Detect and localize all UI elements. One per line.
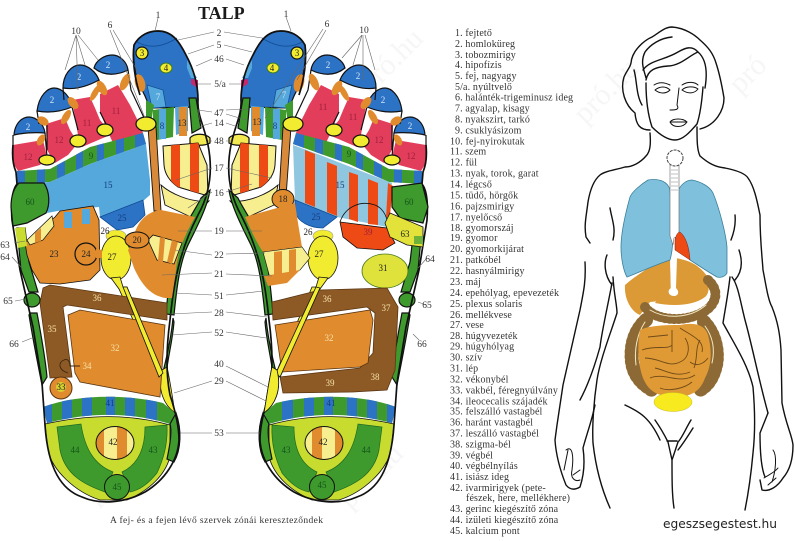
numbered list: 38. szigma-bél <box>450 439 511 450</box>
ureter <box>276 287 320 377</box>
middle labels: 2 <box>217 29 222 39</box>
foot zone numbers: 12 <box>406 151 416 161</box>
watermark: pró.hu <box>77 432 155 510</box>
foot zone numbers: 31 <box>378 263 388 273</box>
middle labels: 40 <box>214 360 224 370</box>
middle labels: 17 <box>214 164 224 174</box>
middle labels: 28 <box>214 309 224 319</box>
zone 25 <box>100 200 145 230</box>
facial features <box>654 82 698 126</box>
foot zone numbers: 8 <box>273 121 278 131</box>
foot zone numbers: 23 <box>50 249 59 259</box>
bust right <box>731 215 741 280</box>
foot zone numbers: 2 <box>408 121 412 131</box>
middle labels: 64 <box>425 255 435 265</box>
small intestine <box>638 324 711 397</box>
liver and stomach <box>625 253 709 315</box>
numbered list: 18. gyomorszáj <box>450 223 514 234</box>
numbered list: 16. pajzsmirigy <box>450 201 514 212</box>
middle labels: 66 <box>9 340 19 350</box>
zone 15 lung <box>19 144 150 217</box>
middle labels: 65 <box>422 301 432 311</box>
numbered list: 28. húgyvezeték <box>450 331 518 342</box>
foot zone numbers: 11 <box>319 102 327 112</box>
foot zone numbers: 15 <box>336 180 345 190</box>
numbered list: 29. húgyhólyag <box>450 342 514 353</box>
foot zone numbers: 2 <box>356 71 360 81</box>
foot zone numbers: 32 <box>324 333 334 343</box>
numbered list: 41. isiász ideg <box>450 472 509 483</box>
heart <box>675 232 690 260</box>
neck and left shoulder <box>555 133 650 489</box>
numbered list: 34. ileocecalis szájadék <box>450 397 548 408</box>
zone 63 <box>15 216 54 248</box>
numbered list: 2. homloküreg <box>455 39 515 50</box>
foot zone numbers: 42 <box>108 437 118 447</box>
foot zone numbers: 27 <box>108 252 117 262</box>
foot zone numbers: 7 <box>282 90 287 100</box>
middle labels: 10 <box>71 27 81 37</box>
middle labels: 19 <box>214 227 224 237</box>
hand left fingers <box>564 449 580 481</box>
numbered list: 35. felszálló vastagbél <box>450 406 543 417</box>
liver notches <box>64 209 90 228</box>
foot zone numbers <box>24 48 416 492</box>
foot zone numbers: 42 <box>318 437 328 447</box>
foot zone numbers: 2 <box>77 72 81 82</box>
foot zone numbers: 11 <box>349 112 357 122</box>
middle labels: 46 <box>214 55 224 65</box>
middle labels: 29 <box>214 377 224 387</box>
middle labels: 53 <box>214 429 224 439</box>
numbered list: 36. haránt vastagbél <box>450 417 533 428</box>
foot zone numbers: 60 <box>26 197 35 207</box>
zone 33 <box>50 377 72 399</box>
title: TALP <box>198 3 245 23</box>
numbered list: 45. kalcium pont <box>450 526 520 537</box>
numbered list: 9. csuklyásizom <box>455 126 522 137</box>
foot zone numbers: 7 <box>156 92 161 102</box>
foot zone numbers: 12 <box>54 135 64 145</box>
hand right fingers <box>764 450 778 485</box>
numbered list: 26. mellékvese <box>450 310 512 321</box>
torso right <box>723 277 768 510</box>
hair <box>623 27 724 130</box>
groin <box>625 405 693 508</box>
hair fringe <box>634 37 706 105</box>
zone 30 heart <box>340 222 395 250</box>
middle labels: 21 <box>214 270 224 280</box>
numbered list: 13. nyak, torok, garat <box>450 168 539 179</box>
zone 22 <box>263 247 310 286</box>
foot zone numbers: 12 <box>374 135 384 145</box>
numbered list: 40. végbélnyílás <box>450 461 518 472</box>
foot zone numbers: 43 <box>282 445 291 455</box>
numbered list: 31. lép <box>450 364 478 375</box>
foot zone numbers: 13 <box>252 117 262 127</box>
foot zone numbers: 11 <box>83 118 91 128</box>
foot zone numbers: 38 <box>370 372 380 382</box>
numbered list: 23. máj <box>450 277 481 288</box>
numbered list: 20. gyomorkijárat <box>450 244 524 255</box>
bust left <box>605 208 614 285</box>
zone 18 <box>272 190 294 208</box>
foot zone numbers: 15 <box>104 180 113 190</box>
numbered list: 14. légcső <box>450 179 492 190</box>
woman figure <box>555 27 793 510</box>
foot zone numbers: 33 <box>56 382 66 392</box>
foot zone numbers: 34 <box>82 361 92 371</box>
numbered list: 24. epehólyag, epevezeték <box>450 288 559 299</box>
numbered list: 5/a. nyúltvelő <box>455 82 512 93</box>
numbered list: 1. fejtető <box>455 28 492 39</box>
middle labels: 47 <box>214 109 224 119</box>
foot zone numbers: 18 <box>278 194 288 204</box>
foot zone numbers: 63 <box>400 229 410 239</box>
middle labels: 16 <box>214 189 224 199</box>
foot zone numbers: 24 <box>82 249 91 259</box>
torso left <box>580 277 617 508</box>
foot zone numbers: 25 <box>118 213 127 223</box>
ureter over intestine <box>123 287 163 377</box>
foot zone numbers: 9 <box>347 149 352 159</box>
zone 24 gallbladder <box>75 243 102 265</box>
bladder <box>264 367 279 413</box>
colon <box>632 280 717 390</box>
numbered list: 8. nyakszirt, tarkó <box>455 115 530 126</box>
numbered list: 5. fej, nagyagy <box>455 71 517 82</box>
middle labels: 63 <box>0 241 10 251</box>
numbered list <box>450 28 573 537</box>
foot zone numbers: 32 <box>110 343 120 353</box>
numbered list: 4. hipofízis <box>455 60 502 71</box>
site credit: egeszsegestest.hu <box>663 517 777 531</box>
foot zone numbers: 41 <box>106 398 114 408</box>
foot zone numbers: 2 <box>26 122 30 132</box>
foot zone numbers: 45 <box>112 482 122 492</box>
face <box>646 83 703 140</box>
foot zone numbers: 3 <box>295 48 300 58</box>
foot zone numbers: 8 <box>160 121 165 131</box>
foot zone numbers: 2 <box>50 95 54 105</box>
watermark: pró.hu <box>352 22 430 100</box>
middle labels: 6 <box>108 21 113 31</box>
foot zone numbers: 25 <box>312 212 321 222</box>
right shoulder <box>697 127 793 490</box>
zone 23 liver <box>25 206 100 284</box>
middle labels: 5/a <box>214 80 227 90</box>
zone 34 <box>60 359 80 373</box>
foot zone numbers: 3 <box>140 48 145 58</box>
watermark: pró.hu <box>567 52 645 130</box>
zone 32 <box>275 310 373 372</box>
foot zone numbers: 2 <box>326 60 330 70</box>
foot zone numbers: 9 <box>89 151 94 161</box>
foot zone numbers: 36 <box>322 294 332 304</box>
zone 20 <box>125 232 149 248</box>
foot zone numbers: 4 <box>270 63 275 73</box>
middle labels: 51 <box>214 292 224 302</box>
numbered list: 3. tobozmirigy <box>455 50 516 61</box>
watermark: pró.hu <box>332 437 410 515</box>
middle labels: 65 <box>3 297 13 307</box>
foot zone numbers: 35 <box>48 324 57 334</box>
zone 19 <box>245 203 302 252</box>
zone 15 striped lung <box>293 145 393 227</box>
foot zone numbers: 13 <box>178 118 187 128</box>
numbered list: 39. végbél <box>450 450 493 461</box>
zone 63 <box>385 213 423 247</box>
middle labels: 48 <box>214 137 224 147</box>
foot zone numbers: 27 <box>314 249 324 259</box>
foot zone numbers: 2 <box>381 95 385 105</box>
zone 32 small intestine <box>68 310 165 397</box>
foot zone numbers: 39 <box>364 227 373 237</box>
right foot <box>229 31 428 502</box>
middle labels: 1 <box>284 10 289 20</box>
numbered list: 30. szív <box>450 353 482 364</box>
numbered list: 43. gerinc kiegészítő zóna <box>450 504 559 515</box>
lungs <box>621 179 727 277</box>
zone 22 pancreas <box>148 235 182 264</box>
numbered list: fészek, here, mellékhere) <box>466 493 570 504</box>
zone 25 <box>295 200 337 228</box>
middle labels: 22 <box>214 251 224 261</box>
foot zone numbers: 43 <box>148 445 158 455</box>
foot zone numbers: 41 <box>326 398 336 408</box>
middle labels: 10 <box>359 26 369 36</box>
numbered list: 19. gyomor <box>450 233 498 244</box>
numbered list: 44. izületi kiegészítő zóna <box>450 515 559 526</box>
numbered list: 32. vékonybél <box>450 375 509 386</box>
numbered list: 6. halánték-trigeminusz ideg <box>455 93 573 104</box>
foot zone numbers: 20 <box>132 235 142 245</box>
leader lines <box>12 17 427 433</box>
numbered list: 12. fül <box>450 157 477 168</box>
colon 35 36 <box>40 285 167 378</box>
zone 19 stomach <box>128 210 195 298</box>
foot zone numbers: 2 <box>106 60 110 70</box>
watermark <box>77 22 773 515</box>
numbered list: 21. patkóbél <box>450 255 501 266</box>
numbered list: 7. agyalap, kisagy <box>455 104 530 115</box>
numbered list: 10. fej-nyirokutak <box>450 137 525 148</box>
foot zone numbers: 36 <box>92 293 102 303</box>
watermark: pró <box>722 48 773 100</box>
middle labels: 1 <box>156 11 161 21</box>
numbered list: 27. vese <box>450 320 484 331</box>
zone 60 <box>392 183 428 223</box>
zone 31 spleen <box>362 254 408 288</box>
middle labels: 5 <box>217 41 222 51</box>
middle labels: 66 <box>417 340 427 350</box>
foot zone numbers: 11 <box>112 106 120 116</box>
numbered list: 17. nyelőcső <box>450 212 502 223</box>
middle labels: 52 <box>214 329 224 339</box>
caption: A fej- és a fejen lévő szervek zónái keresztezőndek <box>110 515 323 526</box>
numbered list: 25. plexus solaris <box>450 299 522 310</box>
numbered list: 42. ivarmirigyek (pete- <box>450 483 546 494</box>
foot zone numbers: 26 <box>304 227 313 237</box>
foot zone numbers: 45 <box>318 480 327 490</box>
trachea <box>667 150 683 245</box>
foot zone numbers: 60 <box>404 197 414 207</box>
numbered list: 37. leszálló vastagbél <box>450 428 539 439</box>
middle labels: 14 <box>214 119 224 129</box>
zone 60 <box>11 183 49 226</box>
foot zone numbers: 44 <box>70 445 80 455</box>
foot zone numbers: 37 <box>382 303 391 313</box>
middle labels: 64 <box>0 253 10 263</box>
middle labels: 6 <box>325 20 330 30</box>
middle labels <box>0 10 435 439</box>
numbered list: 11. szem <box>450 147 486 158</box>
foot zone numbers: 12 <box>24 152 32 162</box>
numbered list: 22. hasnyálmirigy <box>450 266 525 277</box>
colon 36 37 38 39 <box>272 288 398 393</box>
foot zone numbers: 39 <box>326 378 335 388</box>
foot zone numbers: 44 <box>362 445 371 455</box>
numbered list: 33. vakbél, féregnyúlvány <box>450 386 558 397</box>
bladder <box>654 392 692 412</box>
foot zone numbers: 26 <box>100 226 110 236</box>
foot zone numbers: 4 <box>164 63 169 73</box>
left foot <box>11 31 210 502</box>
numbered list: 15. tüdő, hörgők <box>450 190 518 201</box>
